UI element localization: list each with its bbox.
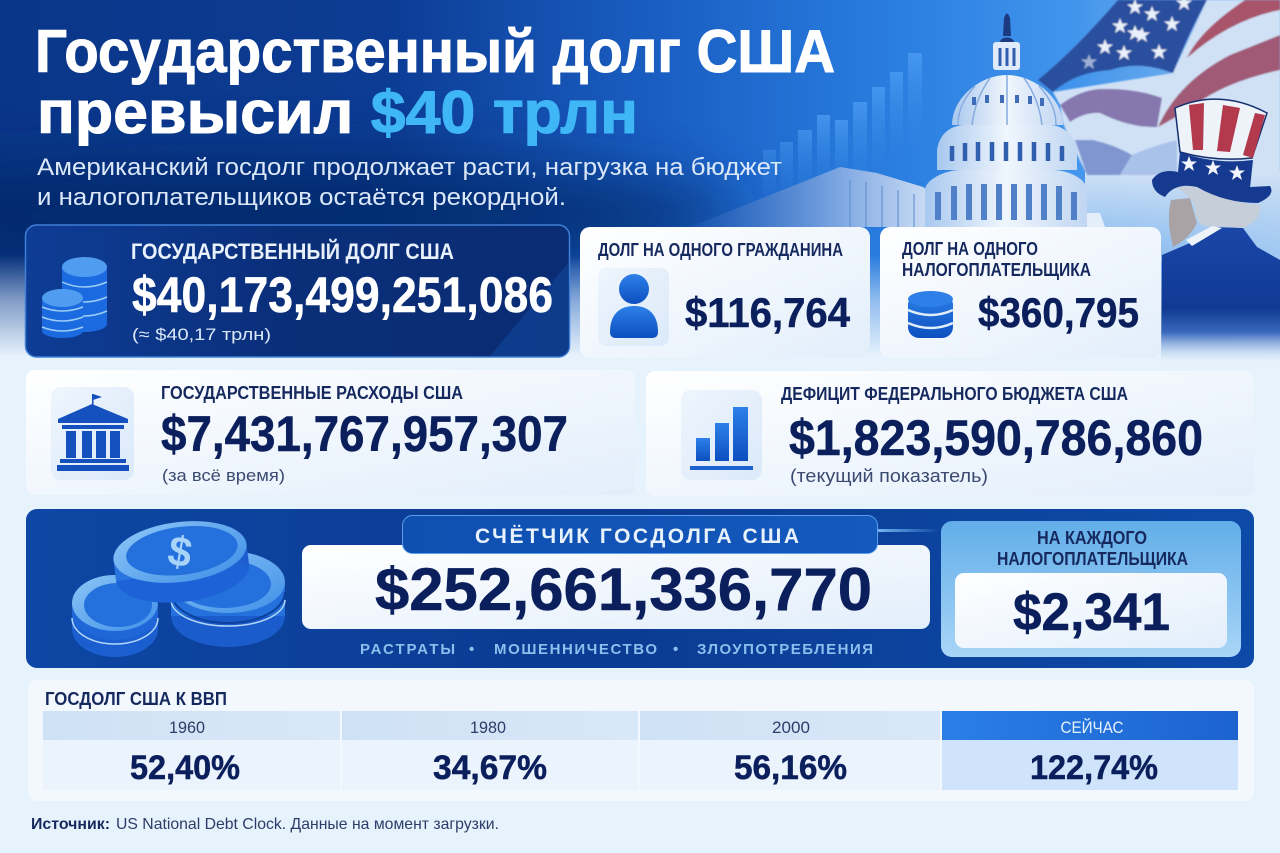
panel: total debt: (≈ $40,17 трлн) xyxy=(132,325,271,344)
panel: debt counter xyxy=(26,509,1254,668)
column now: СЕЙЧАС xyxy=(1060,718,1124,737)
panel: per taxpayer: НА КАЖДОГО xyxy=(1037,528,1147,548)
illustration: blue coins: $ xyxy=(165,526,196,577)
title xyxy=(35,18,835,146)
panel: budget deficit xyxy=(646,371,1254,496)
column 2000 xyxy=(640,711,940,790)
panel: debt per citizen xyxy=(580,227,870,358)
icon: coin stacks xyxy=(42,257,107,338)
panel: debt per taxpayer: НАЛОГОПЛАТЕЛЬЩИКА xyxy=(902,260,1091,280)
panel: debt to gdp table xyxy=(28,680,1254,801)
illustration: american flag xyxy=(1038,0,1280,175)
counter caption: • xyxy=(673,641,678,658)
illustration: blue coins xyxy=(72,514,285,657)
panel: government spending: (за всё время) xyxy=(162,466,285,485)
icon: person xyxy=(598,268,669,346)
counter caption xyxy=(360,641,873,658)
column 1980 xyxy=(342,711,638,790)
source footer: US National Debt Clock. Данные на момент загрузки. xyxy=(116,816,499,833)
counter caption: МОШЕННИЧЕСТВО xyxy=(494,641,657,658)
panel: total debt xyxy=(26,225,570,357)
panel: government spending: $7,431,767,957,307 xyxy=(161,406,568,462)
column 1960: 52,40% xyxy=(130,749,240,787)
column 1980: 34,67% xyxy=(433,749,547,787)
title: превысил $40 трлн xyxy=(37,79,638,146)
rising bars backdrop xyxy=(763,53,922,205)
column now: 122,74% xyxy=(1030,749,1158,787)
panel: debt per taxpayer: ДОЛГ НА ОДНОГО xyxy=(902,239,1038,259)
panel: government spending xyxy=(26,370,635,495)
subtitle xyxy=(37,154,782,211)
subtitle: и налогоплательщиков остаётся рекордной. xyxy=(37,184,566,211)
column now xyxy=(942,711,1238,790)
column 1960: 1960 xyxy=(169,718,205,737)
column 2000: 56,16% xyxy=(734,749,847,787)
panel: per taxpayer: $2,341 xyxy=(1013,583,1170,642)
panel: government spending: ГОСУДАРСТВЕННЫЕ РАСХОДЫ США xyxy=(161,383,463,403)
panel: per taxpayer: НАЛОГОПЛАТЕЛЬЩИКА xyxy=(997,549,1188,569)
panel: debt per taxpayer xyxy=(880,227,1161,358)
title: Государственный долг США xyxy=(35,18,835,85)
subtitle: Американский госдолг продолжает расти, нагрузка на бюджет xyxy=(37,154,782,181)
counter caption: • xyxy=(469,641,474,658)
counter value box: $252,661,336,770 xyxy=(375,556,872,623)
illustration: capitol building xyxy=(690,14,1105,227)
panel: debt per citizen: $116,764 xyxy=(685,289,851,336)
illustration: uncle sam xyxy=(1152,99,1280,362)
column 1960 xyxy=(43,711,340,790)
panel: total debt: $40,173,499,251,086 xyxy=(132,267,553,323)
icon: bar chart xyxy=(681,390,762,480)
icon: database coins xyxy=(908,291,953,338)
panel: per taxpayer xyxy=(941,521,1241,657)
column 2000: 2000 xyxy=(772,718,810,737)
source footer: Источник: xyxy=(31,816,110,833)
counter title tab: СЧЁТЧИК ГОСДОЛГА США xyxy=(475,525,799,548)
icon: government building xyxy=(51,387,134,480)
panel: budget deficit: (текущий показатель) xyxy=(790,466,988,486)
panel: debt per citizen: ДОЛГ НА ОДНОГО ГРАЖДАНИНА xyxy=(598,240,843,260)
panel: debt to gdp table: ГОСДОЛГ США К ВВП xyxy=(45,689,227,709)
counter caption: ЗЛОУПОТРЕБЛЕНИЯ xyxy=(697,641,873,658)
counter value box xyxy=(302,545,930,629)
counter caption: РАСТРАТЫ xyxy=(360,641,455,658)
panel: budget deficit: $1,823,590,786,860 xyxy=(789,410,1203,466)
panel: debt per taxpayer: $360,795 xyxy=(978,289,1139,336)
column 1980: 1980 xyxy=(470,718,506,737)
counter title tab xyxy=(402,516,878,554)
panel: total debt: ГОСУДАРСТВЕННЫЙ ДОЛГ США xyxy=(131,239,454,264)
panel: budget deficit: ДЕФИЦИТ ФЕДЕРАЛЬНОГО БЮДЖЕТА США xyxy=(781,384,1128,404)
